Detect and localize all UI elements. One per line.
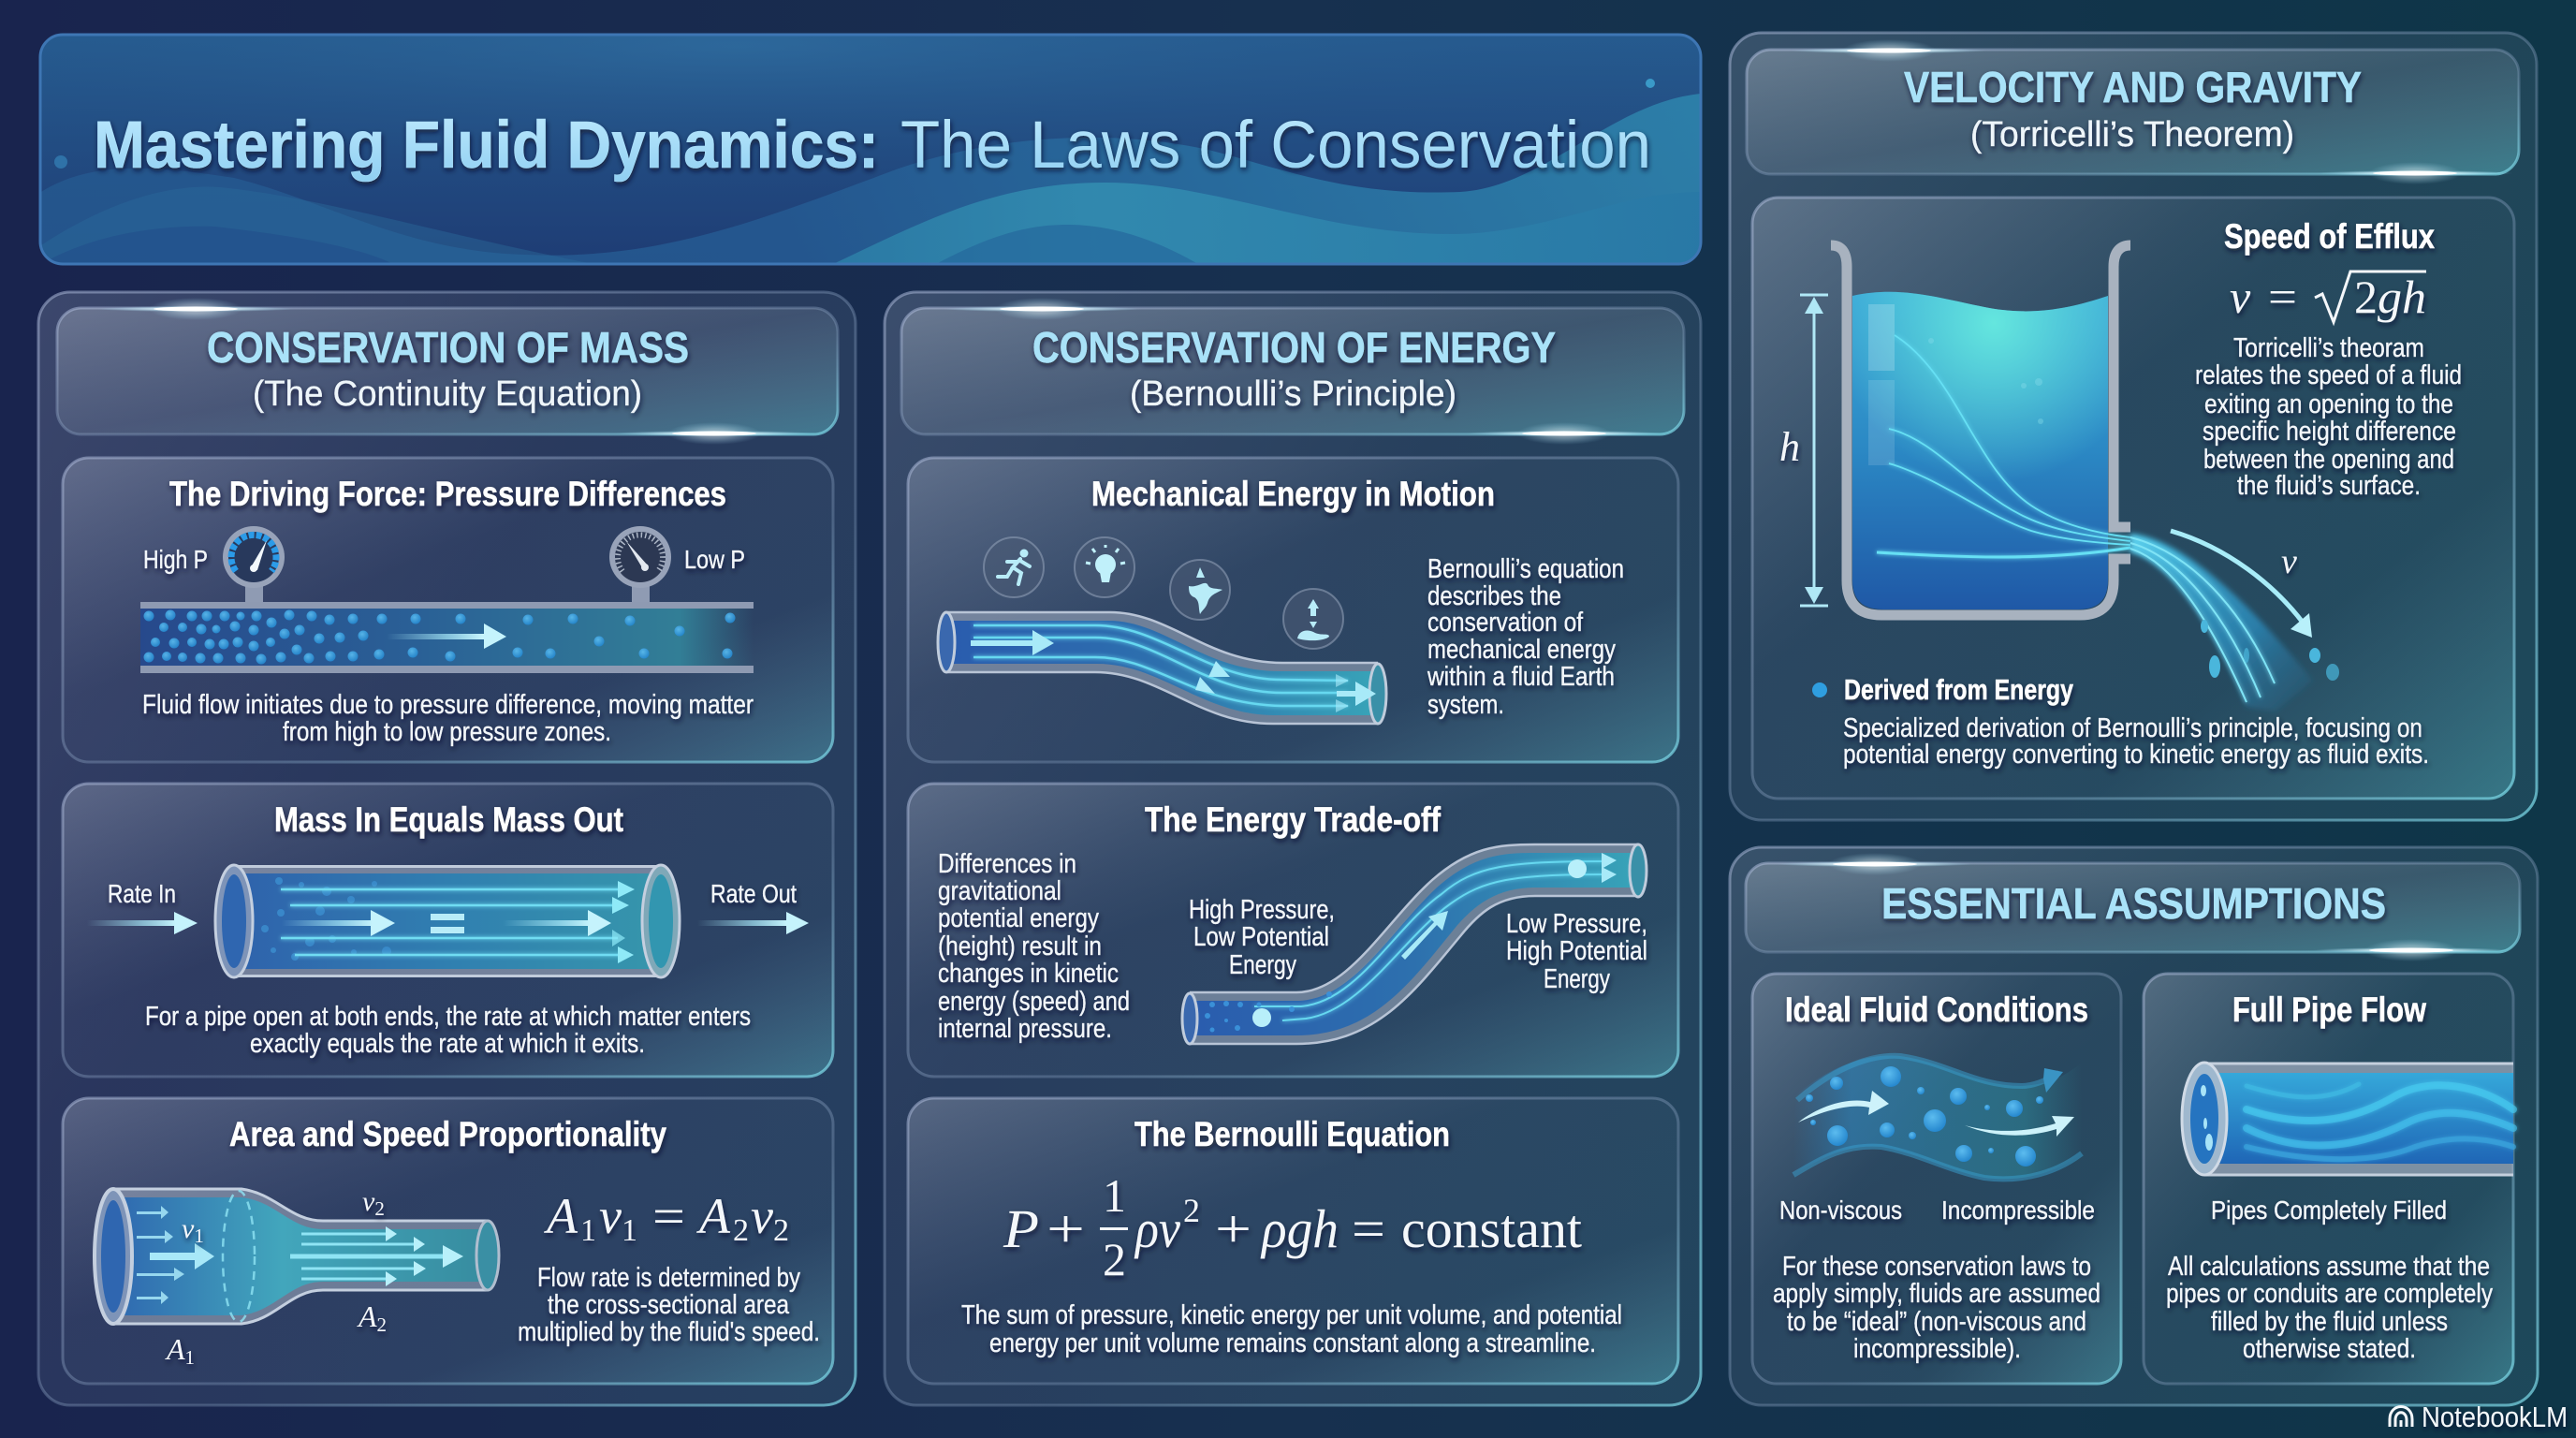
bernoulli equation: ρv (1134, 1198, 1180, 1259)
caption: Flow rate is determined by (537, 1263, 800, 1293)
section heading: essential assumptions: ESSENTIAL ASSUMPTIONS (1881, 879, 2386, 928)
card heading: Mechanical Energy in Motion (1091, 475, 1495, 513)
label: low pressure high potential: Energy (1544, 964, 1610, 994)
panel: conservation of mass (38, 292, 856, 1405)
section heading: conservation of energy (901, 298, 1684, 445)
label: high pressure low potential: High Pressure, (1189, 895, 1335, 925)
continuity equation: 2 (733, 1213, 749, 1248)
torricelli equation: gh (2378, 271, 2426, 323)
label: low pressure: Low P (684, 545, 745, 574)
description text: pipes or conduits are completely (2166, 1279, 2493, 1309)
dimension: height h: h (1779, 424, 1800, 470)
caption: For a pipe open at both ends, the rate at which matter enters (145, 1002, 751, 1032)
description text: between the opening and (2203, 445, 2454, 475)
icon: kinetic runner (984, 537, 1044, 597)
continuity equation: 1 (622, 1213, 637, 1248)
formula labels on pipe: 2 (374, 1197, 385, 1220)
section heading: conservation of mass: CONSERVATION OF MASS (207, 323, 689, 372)
caption: exactly equals the rate at which it exits. (250, 1029, 645, 1059)
section heading: conservation of mass (57, 298, 838, 445)
formula labels on pipe: A (167, 1332, 185, 1366)
continuity equation: A (544, 1188, 578, 1244)
description text: within a fluid Earth (1427, 662, 1615, 692)
diagram: full pipe (2182, 1063, 2513, 1175)
formula labels on pipe: 1 (194, 1225, 204, 1247)
formula labels on pipe: 2 (377, 1313, 387, 1336)
panel: velocity and gravity (1730, 33, 2537, 820)
description text: incompressible). (1853, 1334, 2021, 1364)
title text (94, 109, 1651, 183)
description text: describes the (1427, 581, 1561, 611)
bullet: derived from energy: Derived from Energy (1844, 673, 2074, 706)
arrow: rate in (87, 912, 198, 934)
card: bernoulli equation (908, 1098, 1678, 1384)
icon: light bulb (1075, 537, 1134, 597)
description text (1427, 554, 1624, 720)
section heading: conservation of energy: CONSERVATION OF ENERGY (1032, 323, 1556, 372)
description text: Bernoulli’s equation (1427, 554, 1624, 584)
card: ideal fluid conditions (1752, 974, 2121, 1384)
label: low pressure high potential: High Potential (1506, 936, 1647, 966)
description text: potential energy (938, 903, 1099, 933)
caption: the cross-sectional area (548, 1290, 790, 1320)
description text (2195, 333, 2462, 501)
continuity equation: 2 (773, 1213, 789, 1248)
description text (938, 849, 1130, 1044)
continuity equation: 1 (580, 1213, 596, 1248)
description text: energy (speed) and (938, 987, 1130, 1017)
description text: apply simply, fluids are assumed (1773, 1279, 2100, 1309)
description text: internal pressure. (938, 1014, 1112, 1044)
formula labels on pipe: 1 (185, 1346, 195, 1369)
description text: Differences in (938, 849, 1076, 879)
card: mechanical energy (908, 458, 1678, 762)
formula labels on pipe: v (182, 1213, 194, 1244)
label: rate out: Rate Out (710, 879, 797, 908)
caption: Fluid flow initiates due to pressure difference, moving matter (142, 690, 754, 720)
caption: from high to low pressure zones. (283, 717, 611, 747)
bernoulli equation: constant (1401, 1198, 1582, 1259)
panel: conservation of energy (885, 292, 1701, 1405)
torricelli equation (2230, 271, 2426, 323)
card heading: Area and Speed Proportionality (229, 1115, 666, 1153)
diagram: draining tank (1831, 245, 2339, 712)
description text: to be “ideal” (non-viscous and (1787, 1307, 2086, 1337)
label: low pressure high potential (1506, 909, 1647, 994)
torricelli equation: v (2230, 271, 2251, 323)
diagram: narrowing pipe (95, 1189, 499, 1324)
label: velocity v: v (2281, 542, 2297, 581)
description text: the fluid’s surface. (2237, 471, 2421, 501)
card: area and speed (63, 1098, 833, 1384)
icon: potential energy shape (1170, 560, 1230, 620)
bernoulli equation: 2 (1103, 1233, 1126, 1285)
icon: pressure arrows over hand (1283, 589, 1343, 649)
description text: Torricelli’s theoram (2233, 333, 2424, 363)
card heading: Full Pipe Flow (2232, 990, 2426, 1029)
continuity equation: v (751, 1188, 773, 1244)
label: pipes completely filled: Pipes Completely Filled (2211, 1196, 2447, 1225)
label: high pressure low potential: Low Potential (1193, 922, 1329, 952)
bernoulli equation: + (1046, 1198, 1085, 1259)
card: energy trade-off (908, 784, 1678, 1077)
formula labels on pipe (165, 1186, 387, 1369)
bernoulli equation: = (1352, 1198, 1385, 1259)
card heading: Mass In Equals Mass Out (274, 800, 623, 839)
title text: Mastering Fluid Dynamics: (94, 109, 879, 183)
caption: multiplied by the fluid's speed. (518, 1317, 820, 1347)
description text: mechanical energy (1427, 635, 1616, 665)
caption: The sum of pressure, kinetic energy per unit volume, and potential (961, 1300, 1622, 1330)
diagram: straight pipe (215, 865, 680, 977)
card heading: The Energy Trade-off (1145, 800, 1442, 839)
label: incompressible: Incompressible (1941, 1196, 2095, 1225)
description text: conservation of (1427, 608, 1584, 638)
description text (2166, 1252, 2493, 1364)
formula labels on pipe: A (359, 1299, 377, 1333)
dimension: height h (1779, 295, 1828, 606)
continuity equation: A (696, 1188, 731, 1244)
title banner (40, 35, 1701, 264)
section heading: velocity and gravity: (Torricelli’s Theorem) (1970, 115, 2294, 154)
label: low pressure high potential: Low Pressure, (1506, 909, 1647, 939)
description text: (height) result in (938, 932, 1102, 961)
torricelli equation: 2 (2354, 271, 2378, 323)
card heading: The Driving Force: Pressure Differences (169, 475, 726, 513)
bernoulli equation: 1 (1103, 1169, 1126, 1222)
description text (1773, 1252, 2100, 1364)
description text: filled by the fluid unless (2211, 1307, 2448, 1337)
arrow: rate out (697, 912, 809, 934)
bullet: derived from energy: potential energy converting to kinetic energy as fluid exits. (1843, 740, 2429, 770)
description text: exiting an opening to the (2204, 389, 2453, 419)
sub-heading: speed of efflux: Speed of Efflux (2224, 217, 2435, 256)
description text: All calculations assume that the (2168, 1252, 2490, 1282)
label: non-viscous: Non-viscous (1779, 1196, 1902, 1225)
bullet: derived from energy (1812, 673, 2429, 770)
formula labels on pipe: v (362, 1186, 374, 1217)
section heading: conservation of mass: (The Continuity Equation) (253, 374, 642, 414)
continuity equation: v (599, 1188, 622, 1244)
card: mass in equals mass out (63, 784, 833, 1077)
bernoulli equation (1003, 1169, 1582, 1285)
card: full pipe flow (2144, 974, 2513, 1384)
description text: changes in kinetic (938, 959, 1119, 989)
title text: The Laws of Conservation (900, 109, 1651, 183)
description text: gravitational (938, 876, 1061, 906)
label: high pressure low potential: Energy (1229, 950, 1296, 980)
card: pressure differences (63, 458, 833, 762)
continuity equation: = (652, 1188, 685, 1244)
caption: energy per unit volume remains constant along a streamline. (989, 1328, 1596, 1358)
section heading: velocity and gravity: VELOCITY AND GRAVITY (1904, 63, 2362, 111)
continuity equation (544, 1188, 789, 1248)
label: rate in: Rate In (108, 879, 176, 908)
panel: essential assumptions (1730, 847, 2538, 1405)
caption (518, 1263, 820, 1347)
description text: otherwise stated. (2243, 1334, 2416, 1364)
bernoulli equation: ρgh (1260, 1198, 1339, 1259)
description text: specific height difference (2203, 417, 2456, 447)
diagram: rising pipe (1182, 844, 1647, 1044)
card heading: Ideal Fluid Conditions (1785, 990, 2088, 1029)
caption (142, 690, 754, 747)
description text: system. (1427, 690, 1504, 720)
section heading: conservation of energy: (Bernoulli’s Principle) (1130, 374, 1456, 414)
label: high pressure: High P (143, 545, 208, 574)
bernoulli equation: 2 (1183, 1192, 1200, 1229)
caption (145, 1002, 751, 1059)
description text: For these conservation laws to (1782, 1252, 2091, 1282)
diagram: pipe with streamlines (938, 612, 1386, 724)
bernoulli equation: P (1003, 1198, 1039, 1259)
section heading: velocity and gravity (1747, 39, 2519, 184)
icon: high pressure gauge (223, 526, 285, 603)
torricelli equation: = (2268, 271, 2297, 323)
card heading: The Bernoulli Equation (1134, 1115, 1450, 1153)
diagram: ideal fluid ribbon (1793, 1055, 2082, 1179)
diagram: pipe with particles (140, 602, 754, 673)
label: high pressure low potential (1189, 895, 1335, 980)
bullet: derived from energy: Specialized derivation of Bernoulli’s principle, focusing on (1843, 713, 2422, 743)
description text: relates the speed of a fluid (2195, 360, 2462, 390)
bernoulli equation: + (1215, 1198, 1251, 1259)
card: torricelli diagram and text (1752, 198, 2514, 799)
caption (961, 1300, 1622, 1358)
icon: low pressure gauge (609, 526, 671, 603)
section heading: essential assumptions (1746, 853, 2520, 961)
